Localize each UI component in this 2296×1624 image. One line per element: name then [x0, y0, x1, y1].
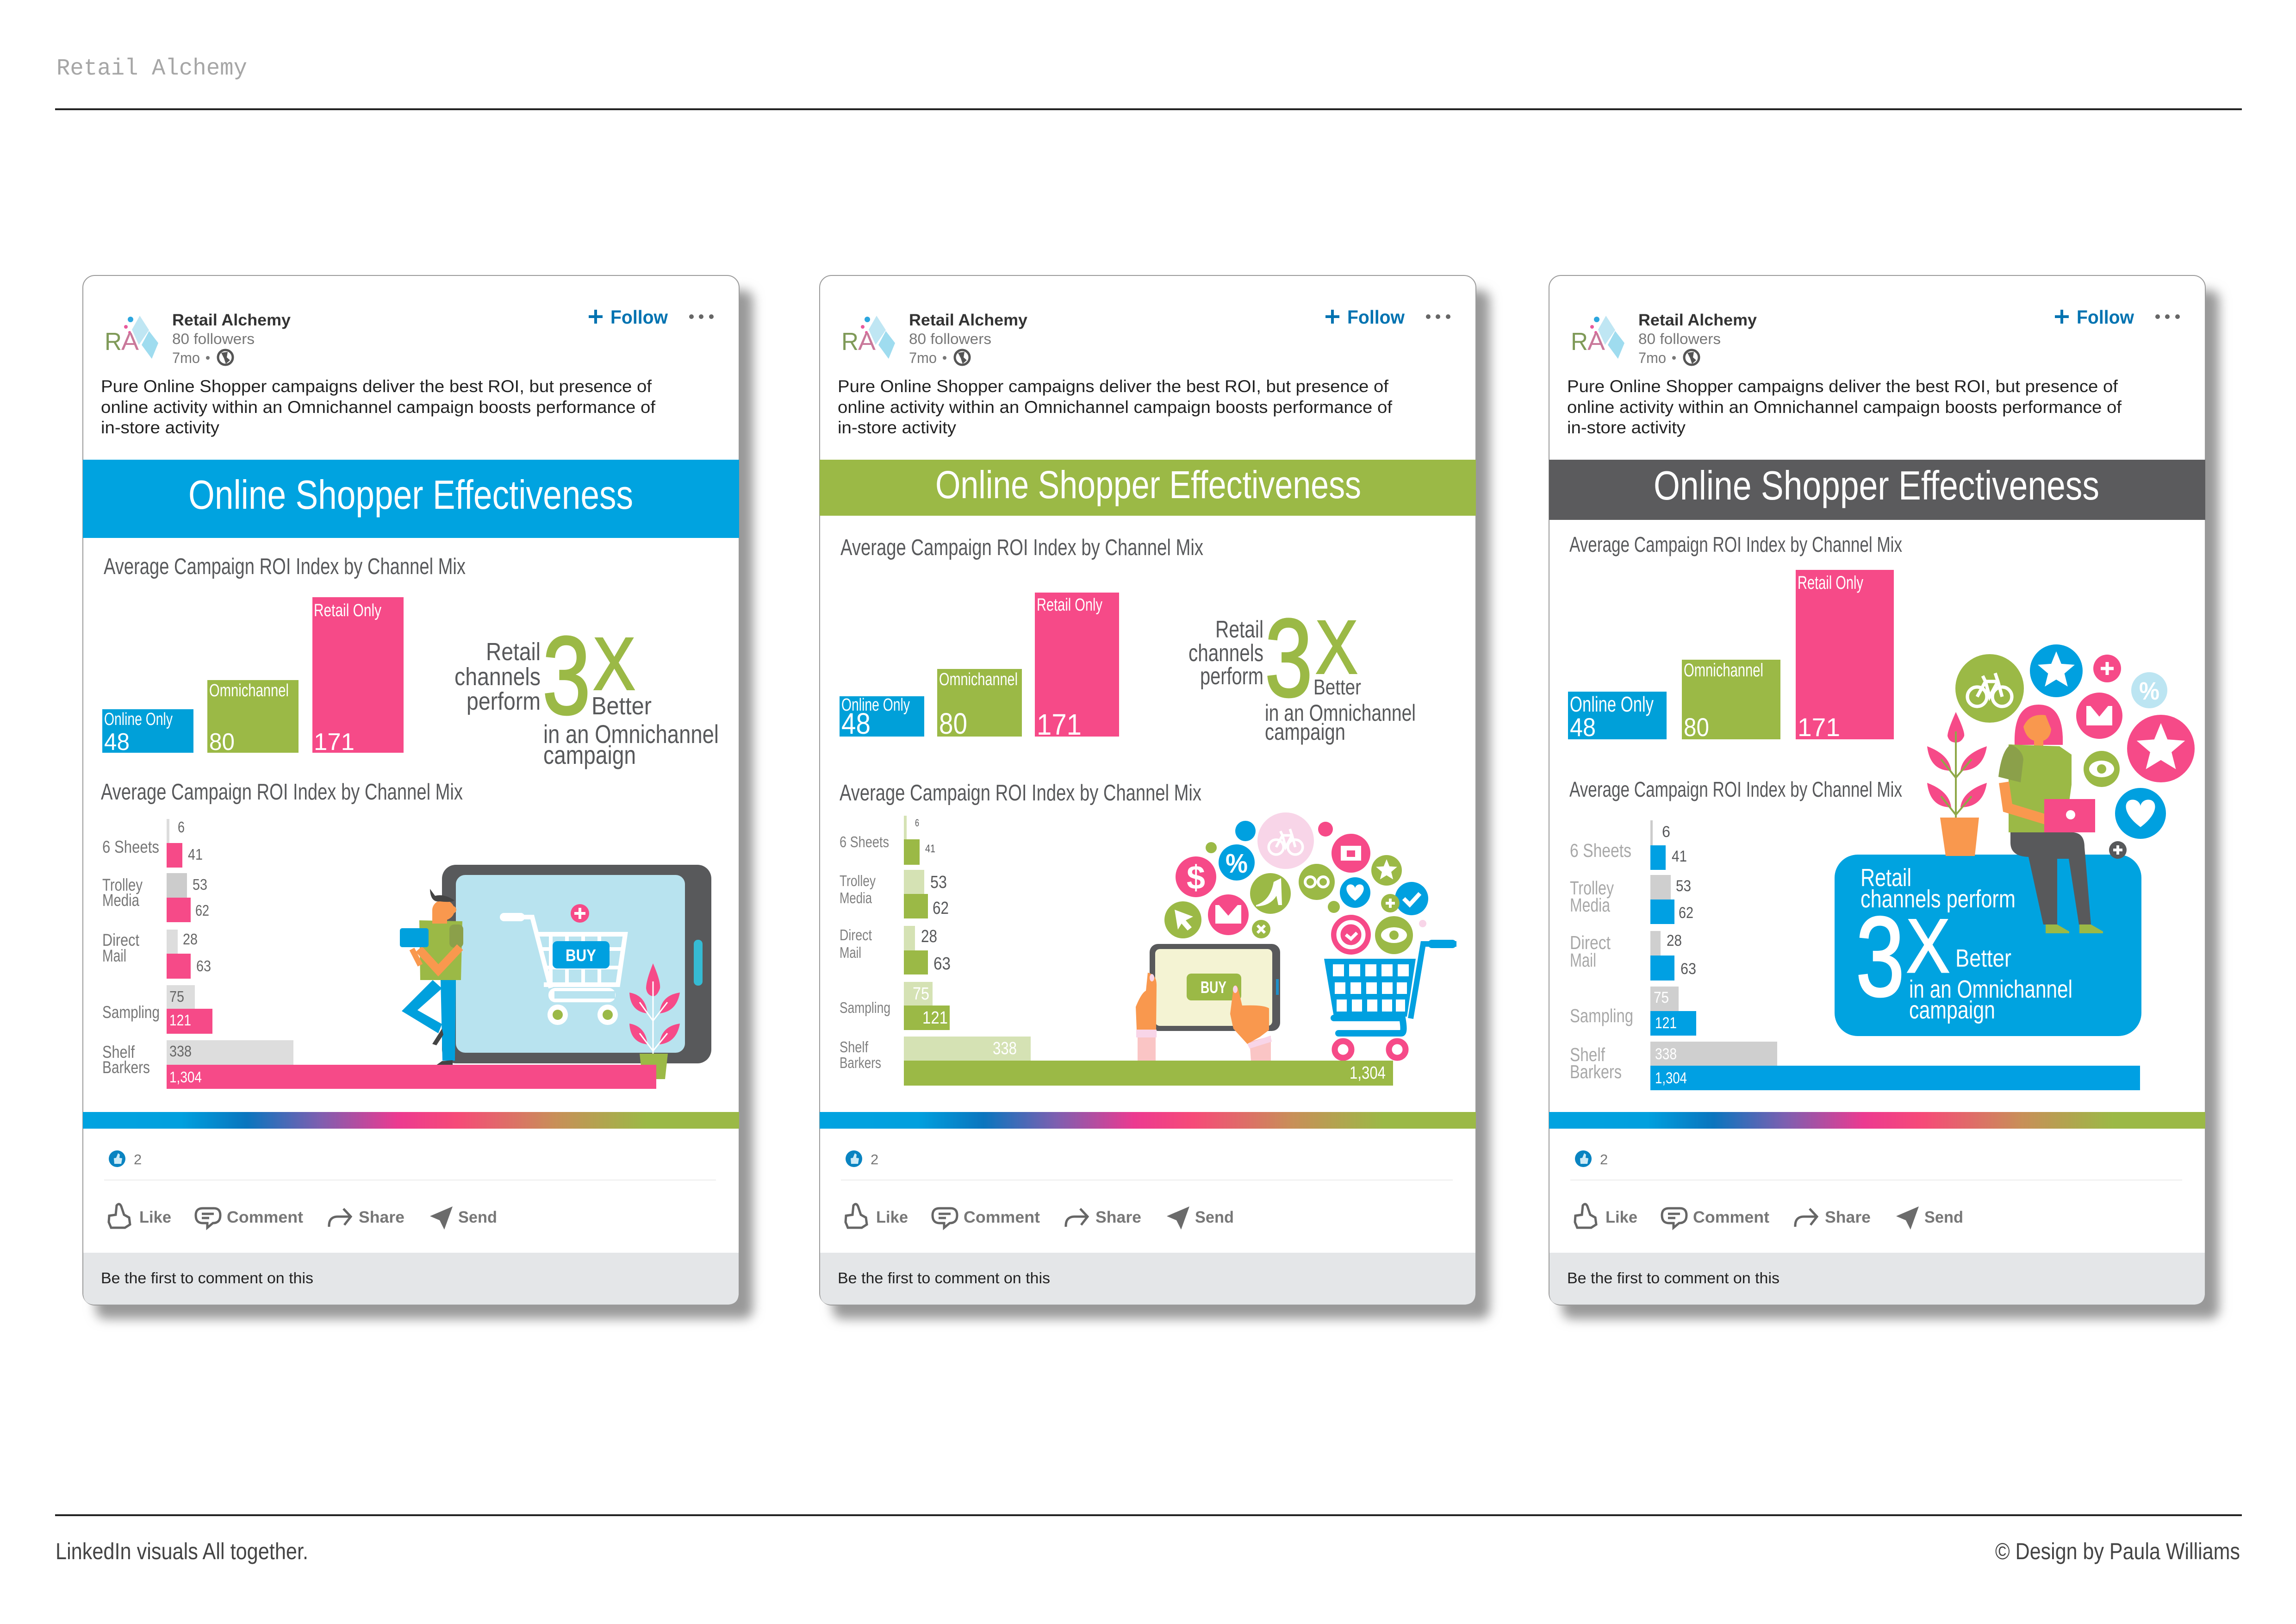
bar chart: media channels: 41 — [188, 846, 203, 863]
bar chart: media channels: Barkers — [840, 1054, 881, 1071]
bar chart: media channels: Direct — [102, 931, 140, 949]
icon: company logo — [841, 316, 895, 359]
bar chart: channel mix ROI: Omnichannel — [1684, 660, 1763, 681]
post author block: 80 followers — [172, 331, 255, 347]
icon bubbles: $ — [1187, 859, 1205, 896]
post body text — [838, 377, 1393, 437]
heading: chart one: Average Campaign ROI Index by Channel Mix — [840, 535, 1203, 560]
gradient band — [1549, 1112, 2205, 1129]
post body text: in-store activity — [1567, 418, 1686, 437]
figure: man with tablet — [400, 889, 463, 1067]
bar chart: media channels: 338 — [169, 1043, 192, 1060]
bar chart: media channels — [840, 816, 1393, 1086]
callout: retail 3X better — [1188, 596, 1416, 745]
banner: green title: Online Shopper Effectiveness — [935, 463, 1361, 506]
bar chart: media channels: 63 — [1680, 960, 1696, 978]
callout: retail 3X better: perform — [467, 687, 541, 715]
gradient band — [820, 1112, 1476, 1129]
bar chart: channel mix ROI: Online Only — [1570, 692, 1654, 716]
post body text: in-store activity — [101, 418, 220, 437]
bar chart: media channels: 6 — [178, 818, 185, 836]
post author block: Retail Alchemy — [1638, 311, 1757, 329]
figure: woman with laptop — [1998, 705, 2103, 933]
follow button — [2055, 306, 2180, 328]
action bar: like comment share send — [109, 1204, 497, 1230]
bar chart: channel mix ROI — [840, 593, 1119, 741]
bar chart: media channels: 6 Sheets — [1570, 840, 1631, 861]
follow button: Follow — [2077, 306, 2134, 328]
callout: retail 3X better: 3 — [1265, 596, 1313, 720]
banner: grey title — [1549, 460, 2205, 520]
comment footer — [83, 1253, 739, 1305]
bar chart: media channels: 41 — [1672, 848, 1687, 865]
bar chart: media channels: 28 — [921, 927, 937, 946]
bar chart: media channels — [1570, 820, 2140, 1090]
page header: Retail Alchemy: Retail Alchemy — [56, 56, 247, 82]
action bar: like comment share send: Like — [1605, 1208, 1637, 1226]
bar chart: media channels: 1,304 — [1655, 1069, 1687, 1087]
action bar: like comment share send: Comment — [1693, 1208, 1769, 1226]
bar chart: channel mix ROI: Online Only — [841, 695, 910, 715]
bar chart: channel mix ROI: Online Only — [104, 710, 173, 729]
bar chart: channel mix ROI: 171 — [1037, 708, 1082, 741]
bar chart: media channels: Barkers — [102, 1058, 150, 1077]
reaction count — [109, 1150, 142, 1168]
comment footer: Be the first to comment on this — [101, 1269, 313, 1287]
action bar: like comment share send: Send — [1195, 1208, 1234, 1226]
post body text — [101, 377, 656, 437]
bar chart: channel mix ROI: Omnichannel — [209, 681, 289, 700]
post author block: 7mo — [1638, 350, 1666, 366]
bar chart: channel mix ROI: 80 — [1684, 712, 1709, 742]
bar chart: media channels: 53 — [1676, 877, 1691, 895]
footer rule — [55, 1514, 2242, 1516]
post body text: online activity within an Omnichannel campaign boosts performance of — [1567, 398, 2122, 417]
action bar: like comment share send: Comment — [964, 1208, 1040, 1226]
reaction count: 2 — [1600, 1151, 1608, 1168]
icon: company logo: A — [858, 328, 876, 356]
post body text: Pure Online Shopper campaigns deliver the best ROI, but presence of — [1567, 377, 2118, 396]
callout: retail 3X better: X — [1316, 605, 1357, 689]
card shell and social chrome — [83, 275, 753, 1319]
banner: blue title — [83, 460, 739, 538]
action bar: like comment share send: Comment — [227, 1208, 303, 1226]
action bar: like comment share send: Share — [1825, 1208, 1871, 1226]
callout: retail 3X better: campaign — [1265, 719, 1345, 745]
bar chart: channel mix ROI: 48 — [841, 707, 871, 740]
bar chart: media channels: 62 — [195, 902, 209, 919]
callout: retail 3X better: in an Omnichannel — [1265, 700, 1416, 726]
bar chart: media channels: 62 — [933, 899, 949, 918]
callout: retail 3X better on blue panel: in an Omnichannel — [1909, 975, 2072, 1003]
bar chart: media channels: Media — [1570, 894, 1610, 916]
heading: chart two: Average Campaign ROI Index by Channel Mix — [101, 780, 463, 805]
post body text: Pure Online Shopper campaigns deliver the best ROI, but presence of — [101, 377, 652, 396]
follow button — [589, 306, 714, 328]
action bar: like comment share send: Like — [139, 1208, 171, 1226]
bar chart: media channels: Barkers — [1570, 1061, 1622, 1082]
icon: cart — [504, 904, 625, 1025]
bar chart: media channels: Sampling — [1570, 1005, 1633, 1026]
bar chart: media channels: 53 — [930, 873, 947, 892]
bar chart: media channels: Mail — [1570, 949, 1596, 971]
bar chart: channel mix ROI: Retail Only — [1037, 595, 1102, 615]
icon: company logo: A — [121, 328, 139, 356]
bar chart: media channels: 6 — [1662, 823, 1670, 841]
bar chart: channel mix ROI: 171 — [314, 729, 355, 756]
icon bubbles: % — [1226, 849, 1248, 879]
callout: retail 3X better: X — [593, 622, 635, 705]
callout: retail 3X better on blue panel: 3 — [1856, 893, 1904, 1020]
callout: retail 3X better on blue panel: Retail — [1860, 864, 1911, 892]
bar chart: media channels: 53 — [193, 876, 207, 893]
icon bubbles — [1164, 812, 1428, 955]
bar chart: media channels: 75 — [913, 984, 929, 1004]
panel: grey LinkedIn post card — [1549, 275, 2219, 1319]
gradient band — [83, 1112, 739, 1129]
bar chart: media channels: 6 — [915, 817, 919, 829]
icon: tablet with buy button: BUY — [1201, 978, 1226, 997]
icon: company logo — [1571, 316, 1624, 359]
bar chart: media channels: 6 Sheets — [840, 833, 889, 850]
bar chart: media channels: 338 — [993, 1039, 1017, 1058]
illustration: floating icons, tablet, hands and cart — [1136, 812, 1456, 1061]
action bar: like comment share send — [846, 1204, 1234, 1230]
icon bubbles — [1955, 644, 2195, 859]
callout: retail 3X better on blue panel — [1835, 855, 2141, 1036]
post body text — [1567, 377, 2122, 437]
banner: blue title: Online Shopper Effectiveness — [188, 472, 633, 518]
action bar: like comment share send — [1575, 1204, 1963, 1230]
bar chart: media channels: Mail — [840, 944, 861, 961]
post body text: online activity within an Omnichannel campaign boosts performance of — [101, 398, 656, 417]
post author block: Retail Alchemy — [172, 311, 291, 329]
callout: retail 3X better: campaign — [543, 740, 636, 769]
action bar: like comment share send: Send — [458, 1208, 497, 1226]
callout: retail 3X better: in an Omnichannel — [543, 719, 719, 749]
icon: company logo: R — [105, 328, 122, 356]
heading: chart one: Average Campaign ROI Index by Channel Mix — [104, 554, 466, 579]
reaction count — [1575, 1150, 1608, 1168]
bar chart: channel mix ROI — [1568, 570, 1894, 742]
footer right credit: © Design by Paula Williams — [1995, 1538, 2240, 1564]
icon: company logo: R — [1571, 328, 1588, 356]
action bar: like comment share send: Like — [876, 1208, 908, 1226]
heading: chart two: Average Campaign ROI Index by Channel Mix — [840, 781, 1201, 806]
bar chart: media channels: 6 Sheets — [102, 837, 159, 856]
callout: retail 3X better: Better — [591, 692, 652, 720]
banner: green title — [820, 460, 1476, 516]
reaction count: 2 — [134, 1151, 142, 1168]
icon: hands — [1136, 973, 1272, 1061]
action bar: like comment share send: Share — [359, 1208, 404, 1226]
reaction count: 2 — [871, 1151, 878, 1168]
panel: blue LinkedIn post card — [83, 275, 753, 1319]
bar chart: channel mix ROI — [102, 597, 404, 756]
bar chart: media channels: 63 — [196, 957, 211, 974]
post author block: Retail Alchemy — [909, 311, 1028, 329]
callout: retail 3X better: perform — [1200, 663, 1263, 690]
post body text: Pure Online Shopper campaigns deliver the best ROI, but presence of — [838, 377, 1389, 396]
bar chart: channel mix ROI: 48 — [104, 729, 130, 756]
icon: company logo — [105, 316, 158, 359]
callout: retail 3X better — [454, 613, 719, 769]
post author block — [909, 311, 1028, 366]
bar chart: media channels: Mail — [102, 946, 126, 965]
bar chart: media channels: Trolley — [840, 872, 876, 889]
icon bubbles: % — [2139, 677, 2159, 705]
callout: retail 3X better on blue panel: Better — [1955, 944, 2011, 972]
reaction count — [846, 1150, 878, 1168]
bar chart: media channels: Sampling — [840, 999, 890, 1016]
footer left text: LinkedIn visuals All together. — [56, 1538, 308, 1564]
icon: company logo: R — [841, 328, 859, 356]
bar chart: media channels: 1,304 — [1350, 1063, 1386, 1083]
post body text: online activity within an Omnichannel campaign boosts performance of — [838, 398, 1393, 417]
post author block: 7mo — [172, 350, 200, 366]
callout: retail 3X better on blue panel: X — [1906, 903, 1950, 988]
bar chart: media channels: Direct — [840, 926, 872, 943]
bar chart: media channels — [102, 818, 656, 1089]
bar chart: media channels: Shelf — [1570, 1044, 1605, 1065]
comment footer — [1549, 1253, 2205, 1305]
icon: tablet with buy button — [1150, 944, 1280, 1031]
icon: company logo: A — [1587, 328, 1605, 356]
bar chart: media channels: 75 — [1654, 989, 1669, 1006]
bar chart: media channels: Trolley — [1570, 877, 1614, 899]
bar chart: media channels: 28 — [183, 931, 198, 948]
icon: shopping cart — [1324, 940, 1456, 1058]
bar chart: channel mix ROI: Omnichannel — [939, 670, 1018, 689]
bar chart: media channels: 121 — [169, 1012, 191, 1029]
callout: retail 3X better: channels — [454, 663, 541, 691]
card shell and social chrome — [820, 275, 1490, 1319]
post author block — [172, 311, 291, 366]
illustration: tablet with shopping cart and man — [400, 865, 711, 1079]
bar chart: media channels: 1,304 — [169, 1068, 202, 1086]
follow button — [1325, 306, 1450, 328]
bar chart: channel mix ROI: 80 — [209, 729, 235, 756]
bar chart: media channels: 41 — [925, 843, 935, 855]
icon: plant — [629, 963, 680, 1079]
bar chart: channel mix ROI: 171 — [1798, 712, 1840, 742]
comment footer: Be the first to comment on this — [1567, 1269, 1780, 1287]
bar chart: media channels: Direct — [1570, 932, 1611, 953]
bar chart: media channels: 121 — [922, 1008, 948, 1028]
follow button: Follow — [1347, 306, 1405, 328]
callout: retail 3X better: Retail — [486, 638, 541, 666]
post author block: 80 followers — [1638, 331, 1721, 347]
header rule — [55, 108, 2242, 110]
bar chart: media channels: 62 — [1679, 904, 1693, 922]
bar chart: media channels: Shelf — [840, 1038, 869, 1056]
bar chart: media channels: Shelf — [102, 1043, 135, 1062]
callout: retail 3X better: Retail — [1215, 616, 1263, 643]
comment footer: Be the first to comment on this — [838, 1269, 1050, 1287]
icon: cart: BUY — [566, 946, 596, 965]
callout: retail 3X better: Better — [1313, 675, 1361, 699]
bar chart: media channels: 121 — [1655, 1014, 1677, 1032]
bar chart: channel mix ROI: 48 — [1570, 712, 1596, 742]
follow button: Follow — [610, 306, 668, 328]
comment footer — [820, 1253, 1475, 1305]
bar chart: media channels: Media — [840, 889, 872, 906]
heading: chart two: Average Campaign ROI Index by Channel Mix — [1569, 777, 1902, 801]
panel: green LinkedIn post card — [820, 275, 1490, 1319]
heading: chart one: Average Campaign ROI Index by Channel Mix — [1569, 532, 1902, 556]
post body text: in-store activity — [838, 418, 957, 437]
bar chart: channel mix ROI: Retail Only — [314, 601, 381, 620]
icon: plant — [1927, 712, 1987, 856]
callout: retail 3X better: 3 — [542, 613, 591, 737]
card shell and social chrome — [1549, 275, 2219, 1319]
bar chart: media channels: Trolley — [102, 875, 143, 894]
bar chart: channel mix ROI: Retail Only — [1798, 573, 1863, 593]
bar chart: media channels: 75 — [169, 988, 184, 1005]
post author block: 7mo — [909, 350, 937, 366]
post author block — [1638, 311, 1757, 366]
bar chart: media channels: 63 — [933, 954, 951, 974]
bar chart: media channels: 28 — [1667, 932, 1682, 949]
action bar: like comment share send: Send — [1924, 1208, 1963, 1226]
bar chart: media channels: Media — [102, 891, 139, 910]
post author block: 80 followers — [909, 331, 991, 347]
illustration: woman with laptop, plant and icons — [1927, 644, 2195, 933]
callout: retail 3X better: channels — [1188, 640, 1263, 667]
callout: retail 3X better on blue panel: channels perform — [1860, 885, 2016, 913]
banner: grey title: Online Shopper Effectiveness — [1654, 462, 2099, 508]
bar chart: media channels: Sampling — [102, 1003, 160, 1022]
bar chart: channel mix ROI: 80 — [939, 707, 967, 740]
action bar: like comment share send: Share — [1095, 1208, 1141, 1226]
bar chart: media channels: 338 — [1655, 1045, 1677, 1063]
callout: retail 3X better on blue panel: campaign — [1909, 996, 1995, 1024]
